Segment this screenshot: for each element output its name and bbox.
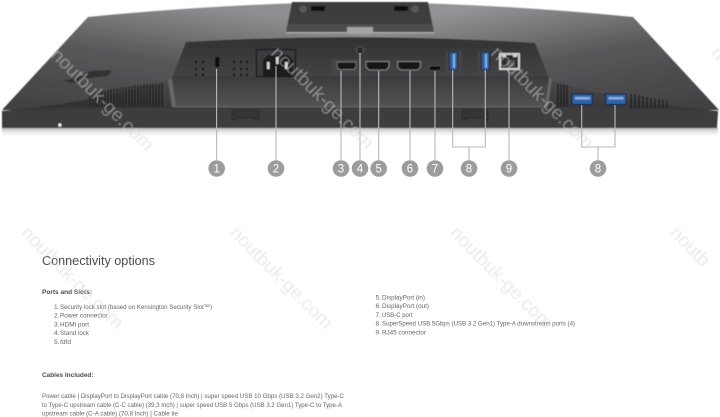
monitor [2,2,719,136]
callout 8: 8 [466,164,472,176]
heading: Connectivity options [42,253,155,268]
callout 5: 5 [375,164,382,176]
callout 2 [268,160,284,177]
callout 4 [352,160,368,177]
ports list right: 7. [376,312,381,319]
ports list left: 1. [54,304,60,311]
text content [42,253,575,417]
ports list left: Stand lock [60,330,90,337]
callout 6 [402,160,418,177]
ports list right [376,294,575,336]
watermarks: noutbuk-ge.com [225,223,336,334]
stand clips [232,110,488,120]
callout 1 [208,160,225,177]
stand lock screw [356,46,364,54]
callout 8 [461,160,477,177]
callout 8 side: 8 [595,164,601,176]
side panel right [544,80,718,112]
ports list right: USB-C port [382,312,413,319]
ports list left: 4. [54,330,60,337]
ports list right: SuperSpeed USB 5Gbps (USB 3.2 Gen1) Type-A downstream ports (4) [382,321,575,328]
callout 9 [501,160,517,177]
left vents fade [30,100,88,108]
callout 3 [333,160,349,177]
ports list left: Security lock slot (based on Kensington Security Slot™) [60,304,212,311]
cables paragraph: Power cable | DisplayPort to DisplayPort cable (70,8 Inch) | super speed USB 10 Gbps (USB 3.2 Gen2) Type-C [42,393,344,400]
vent dots [195,61,248,76]
ports list left: 3. [54,321,60,328]
watermarks: noutbuk-ge.com [16,223,127,334]
ports list right: DisplayPort (out) [382,303,429,310]
watermarks: noutbuk-ge.com [445,223,556,334]
DisplayPort in [366,62,389,70]
USB-C port [429,66,441,70]
ports list left: fdfd [60,339,71,346]
ports list right: RJ45 connector [382,329,427,336]
ports list left: Power connector [60,313,109,320]
ports list left: 2. [54,313,60,320]
security lock slot [215,57,220,67]
power connector [256,50,296,76]
watermarks: noutb [665,223,714,271]
watermarks: noutbuk-ge.com [46,45,157,156]
callout 4: 4 [357,164,364,176]
ports list right: 9. [376,329,381,336]
callout 7: 7 [432,164,438,176]
ports list right: 8. [376,321,381,328]
callout 2: 2 [273,164,279,176]
ports list left: HDMI port [60,321,89,328]
DisplayPort out [398,62,420,70]
cables heading: Cables Included: [42,372,94,379]
callout 3: 3 [338,164,344,176]
ports heading: Ports and Slots: [42,289,92,296]
right vents [558,84,667,108]
stand recess [286,2,434,34]
callout 7 [427,160,443,177]
HDMI port [332,59,362,76]
ports list right: DisplayPort (in) [382,294,425,302]
callout 6: 6 [407,164,413,176]
monitor top face [2,2,360,110]
left vents [90,83,162,107]
watermarks: noutbuk-ge.com [266,43,377,154]
power LED [58,124,61,127]
callout 1: 1 [213,164,220,176]
ports list right: 5. [376,294,381,302]
leader lines [217,53,615,160]
watermarks [16,43,720,334]
callouts [208,53,615,177]
cables paragraph: to Type-C upstream cable (C-C cable) (39,3 Inch) | super speed USB 5 Gbps (USB 3.2 Gen1) Type-C to Type-A [42,402,343,409]
callout 5 [370,160,387,177]
callout 9: 9 [506,164,512,176]
watermarks: noutbuk-ge.com [486,43,597,154]
monitor shadow [2,128,718,136]
RJ45 connector [499,53,520,70]
callout 8 side [590,160,606,177]
side panel left [2,80,174,112]
rear foot [63,70,112,83]
ports list right: 6. [376,303,381,310]
side USB-A ports [572,94,626,104]
ports list left: 5. [54,339,60,346]
port recess [168,37,552,108]
cables paragraph [42,393,344,417]
ports list left [54,304,212,346]
front face [2,108,718,128]
USB-A ports [446,51,490,75]
